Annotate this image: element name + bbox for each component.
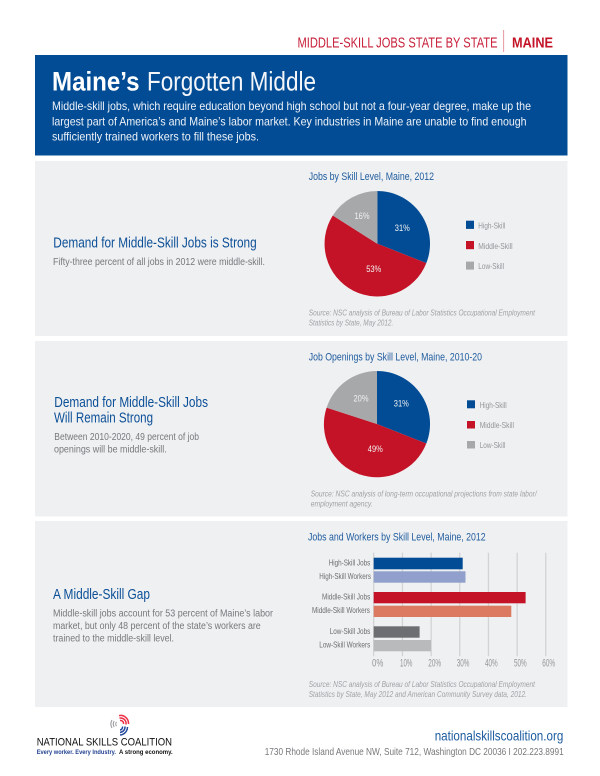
pie chart: job openings by skill level: 31%	[394, 398, 409, 408]
text: gap description: trained to the middle-skill level.	[53, 634, 174, 645]
logo: National Skills Coalition: Every worker. Every Industry.	[37, 749, 116, 756]
intro text: Middle-skill jobs, which require education beyond high school but not a four-year degree, make up the	[52, 100, 531, 113]
source note: employment agency.	[311, 499, 373, 508]
chart title: Jobs by Skill Level, Maine, 2012	[309, 171, 434, 183]
source note	[309, 308, 536, 327]
text: gap description	[53, 609, 274, 645]
source note	[311, 489, 537, 508]
legend	[467, 400, 514, 450]
heading: demand is strong: Demand for Middle-Skill Jobs is Strong	[53, 236, 257, 252]
pie chart: job openings by skill level: 49%	[368, 444, 383, 454]
pie chart: jobs by skill level: 53%	[366, 264, 381, 274]
header: report series and state: MIDDLE-SKILL JOBS STATE BY STATE	[298, 35, 498, 51]
legend	[466, 220, 513, 271]
pie chart: jobs by skill level	[325, 191, 430, 296]
intro text: largest part of America’s and Maine’s labor market. Key industries in Maine are unable to find enough	[52, 115, 527, 128]
axis labels: 10%	[400, 658, 413, 670]
pie chart: job openings by skill level: 20%	[354, 393, 368, 403]
legend: Middle-Skill	[480, 420, 514, 430]
source note: Source: NSC analysis of Bureau of Labor Statistics Occupational Employment	[309, 308, 536, 317]
icon: signal arcs	[111, 715, 129, 735]
bar labels: Middle-Skill Workers	[312, 605, 370, 615]
legend: Middle-Skill	[478, 241, 513, 251]
source note: Statistics by State, May 2012 and American Community Survey data, 2012.	[309, 690, 527, 699]
header: report series and state: MAINE	[512, 35, 553, 51]
logo: National Skills Coalition	[37, 715, 173, 756]
source note: Source: NSC analysis of long-term occupational projections from state labor/	[311, 489, 537, 498]
axis labels: 50%	[514, 658, 527, 670]
bar chart: jobs and workers by skill level	[312, 553, 555, 670]
axis labels: 60%	[542, 658, 555, 670]
heading: demand will remain strong	[54, 395, 208, 427]
legend: High-Skill	[480, 400, 507, 410]
pie chart: job openings by skill level	[324, 371, 430, 477]
panel: job openings by skill level	[35, 341, 568, 516]
source note: Statistics by State, May 2012.	[309, 318, 393, 327]
legend: Low-Skill	[480, 440, 506, 450]
text: gap description: market, but only 48 percent of the state’s workers are	[53, 621, 261, 632]
intro text: sufficiently trained workers to fill these jobs.	[52, 131, 259, 144]
title: Maine’s	[52, 67, 140, 97]
source note	[309, 680, 536, 699]
bar labels: High-Skill Workers	[319, 571, 371, 581]
title: Forgotten Middle	[147, 67, 316, 97]
heading: demand will remain strong: Will Remain Strong	[54, 411, 153, 427]
source note: Source: NSC analysis of Bureau of Labor Statistics Occupational Employment	[309, 680, 536, 689]
panel: jobs and workers	[35, 521, 568, 707]
heading: demand will remain strong: Demand for Middle-Skill Jobs	[54, 395, 208, 411]
logo: National Skills Coalition: A strong economy.	[119, 749, 173, 756]
text: fifty-three percent: Fifty-three percent of all jobs in 2012 were middle-skill.	[53, 257, 265, 268]
legend: Low-Skill	[478, 261, 504, 271]
axis labels: 40%	[485, 658, 498, 670]
text: between 2010-2020: Between 2010-2020, 49 percent of job	[54, 432, 199, 443]
axis labels: 0%	[372, 658, 384, 670]
axis labels: 30%	[457, 658, 470, 670]
axis labels	[372, 658, 555, 670]
intro text	[52, 100, 531, 144]
chart title: Jobs and Workers by Skill Level, Maine, 2012	[308, 532, 486, 544]
bar labels: Low-Skill Jobs	[330, 626, 370, 636]
text: between 2010-2020: openings will be middle-skill.	[54, 444, 167, 455]
bar labels	[312, 558, 371, 649]
heading: a middle-skill gap: A Middle-Skill Gap	[53, 587, 150, 603]
pie chart: jobs by skill level: 31%	[395, 223, 410, 233]
title	[52, 67, 316, 97]
axis labels: 20%	[428, 658, 441, 670]
bar labels: High-Skill Jobs	[329, 558, 370, 568]
panel: jobs by skill level	[35, 161, 568, 336]
bar labels: Low-Skill Workers	[319, 639, 370, 649]
text: between 2010-2020	[54, 432, 199, 455]
pie chart: jobs by skill level: 16%	[354, 211, 370, 221]
footer: website: nationalskillscoalition.org	[435, 728, 563, 744]
text: gap description: Middle-skill jobs account for 53 percent of Maine’s labor	[53, 609, 274, 620]
legend: High-Skill	[478, 220, 505, 230]
panel: title banner	[35, 55, 568, 156]
chart title: Job Openings by Skill Level, Maine, 2010-20	[309, 352, 482, 364]
bar labels: Middle-Skill Jobs	[322, 592, 370, 602]
logo: National Skills Coalition: NATIONAL SKILLS COALITION	[37, 736, 172, 748]
